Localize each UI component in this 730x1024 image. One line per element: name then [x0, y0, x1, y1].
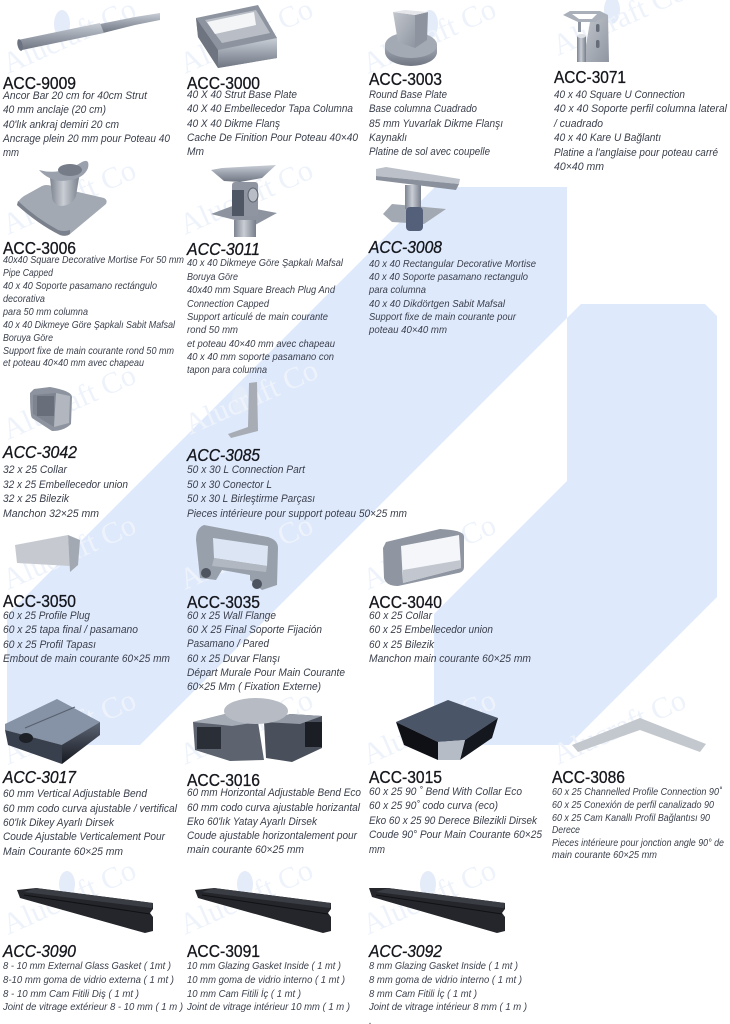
heading: ACC-3071	[554, 67, 626, 87]
description: 40 mm anclaje (20 cm)	[3, 104, 106, 116]
description: 50 x 30 Conector L	[187, 479, 272, 491]
icon: round base plate	[385, 10, 437, 66]
description: / cuadrado	[553, 118, 603, 130]
description: 60 X 25 Final Soporte Fijación	[187, 624, 322, 636]
product: ACC-3011	[186, 165, 344, 376]
description: 40 x 40 mm soporte pasamano con	[187, 351, 334, 363]
description: 40x40 Square Decorative Mortise For 50 mm	[3, 254, 184, 266]
description: 60×25 Mm ( Fixation Externe)	[187, 681, 321, 693]
product: ACC-3006	[2, 161, 184, 369]
description: 40 X 40 Dikme Flanş	[187, 118, 280, 130]
product: ACC-3071	[553, 11, 728, 173]
heading: ACC-3091	[187, 941, 260, 961]
description	[368, 258, 536, 336]
description: main courante 60×25 mm	[552, 849, 657, 861]
product: ACC-3008	[368, 167, 536, 336]
description: main courante 60×25 mm	[187, 844, 304, 856]
icon: 90 degree bend with collar	[396, 700, 498, 760]
description: 40 X 40 Strut Base Plate	[187, 89, 297, 101]
description	[3, 788, 178, 858]
description: Platine a l'anglaise pour poteau carré	[554, 147, 718, 159]
description: Départ Murale Pour Main Courante	[187, 667, 345, 679]
watermarks: Alucraft Co	[0, 358, 141, 446]
heading: ACC-3015	[369, 767, 442, 787]
heading: ACC-3017	[2, 767, 77, 787]
description: 60 x 25 Collar	[369, 610, 433, 622]
description: mm	[3, 147, 19, 159]
description: 60 mm Horizontal Adjustable Bend Eco	[187, 787, 361, 799]
description: 60 x 25 90 ˚ Bend With Collar Eco	[369, 786, 522, 798]
description: decorativa	[3, 293, 45, 305]
description: 40 x 40 Kare U Bağlantı	[554, 132, 661, 144]
description: 8 mm Glazing Gasket Inside ( 1 mt )	[369, 960, 518, 972]
description: Support fixe de main courante rond 50 mm	[3, 345, 174, 357]
description: Derece	[552, 824, 580, 836]
icon: collar 32x25	[30, 387, 72, 431]
description: Kaynaklı	[369, 132, 407, 144]
description: 32 x 25 Embellecedor union	[3, 479, 128, 491]
product: ACC-3000	[187, 5, 359, 158]
description: Support articulé de main courante	[187, 311, 328, 323]
description: 40 X 40 Embellecedor Tapa Columna	[187, 103, 353, 115]
description: Ancor Bar 20 cm for 40cm Strut	[2, 90, 148, 102]
description: Coude 90° Pour Main Courante 60×25	[369, 829, 543, 841]
icon: anchor bar	[16, 13, 160, 51]
icon: strut base plate	[196, 5, 277, 68]
heading: ACC-3003	[369, 69, 442, 89]
watermarks: Alucraft Co	[357, 683, 501, 771]
product: ACC-3035	[187, 525, 345, 693]
description: Round Base Plate	[369, 89, 447, 101]
heading: ACC-3092	[368, 941, 442, 961]
icon: profile plug	[15, 535, 80, 572]
watermarks: Alucraft Co	[0, 153, 141, 241]
watermarks: Alucraft Co	[547, 683, 691, 771]
icon: square U connection	[563, 11, 609, 62]
description: Joint de vitrage intérieur 8 mm ( 1 m )	[368, 1001, 527, 1013]
heading: ACC-3090	[2, 941, 76, 961]
description: Pieces intérieure pour support poteau 50×25 mm	[187, 508, 407, 520]
icon: collar 60x25	[383, 529, 464, 586]
product: ACC-3050	[3, 535, 170, 665]
watermarks: Alucraft Co	[174, 153, 318, 241]
description: 60 x 25 tapa final / pasamano	[3, 624, 138, 636]
description: 40 x 40 Soporte pasamano rectángulo	[3, 280, 157, 292]
description	[187, 89, 359, 158]
description: 60 x 25 Bilezik	[369, 639, 434, 651]
description: 60 mm codo curva ajustable horizantal	[187, 802, 361, 814]
description: 10 mm Cam Fitili İç ( 1 mt )	[187, 988, 301, 1000]
description: 40 x 40 Dikmeye Göre Şapkalı Sabit Mafsal	[3, 319, 176, 331]
icon: rectangular mortise	[376, 167, 460, 231]
icon: vertical adjustable bend	[5, 699, 100, 764]
watermarks: Alucraft Co	[174, 683, 318, 771]
product: ACC-3016	[187, 698, 361, 856]
description: 40 x 40 Dikmeye Göre Şapkalı Mafsal	[187, 257, 344, 269]
description: 40 x 40 Soporte pasamano rectangulo	[369, 271, 528, 283]
product: ACC-3090	[2, 888, 183, 1013]
description: 8-10 mm goma de vidrio externa ( 1 mt )	[3, 974, 174, 986]
description: Pipe Capped	[3, 267, 54, 279]
description	[369, 786, 543, 856]
description: 10 mm goma de vidrio interno ( 1 mt )	[187, 974, 345, 986]
description: et poteau 40×40 mm avec chapeau	[3, 357, 144, 369]
description	[187, 464, 407, 520]
description: 32 x 25 Bilezik	[3, 493, 69, 505]
icon: channelled profile connection	[572, 718, 706, 752]
icon: glass gasket	[17, 888, 153, 933]
description: para columna	[368, 284, 426, 296]
product: ACC-9009	[2, 13, 171, 159]
description	[2, 90, 171, 159]
heading: ACC-3006	[3, 238, 76, 258]
description: 60 x 25 Embellecedor union	[369, 624, 493, 636]
description: para 50 mm columna	[2, 306, 88, 318]
watermarks: Alucraft Co	[174, 508, 318, 596]
description: 60 mm codo curva ajustable / vertifical	[3, 803, 178, 815]
description: Main Courante 60×25 mm	[3, 846, 123, 858]
heading: ACC-3008	[368, 237, 442, 257]
product: ACC-3042	[2, 387, 128, 520]
watermarks: Alucraft Co	[174, 853, 318, 941]
description: Ancrage plein 20 mm pour Poteau 40	[2, 133, 171, 145]
description: 60 x 25 Profil Tapası	[3, 639, 96, 651]
heading: ACC-3016	[187, 770, 260, 790]
description: 50 x 30 L Connection Part	[187, 464, 306, 476]
product: ACC-3086	[552, 718, 724, 861]
watermarks: Alucraft Co	[0, 683, 141, 771]
heading: ACC-3042	[2, 442, 77, 462]
description: Platine de sol avec coupelle	[369, 146, 490, 158]
description: poteau 40×40 mm	[368, 324, 447, 336]
watermarks: Alucraft Co	[357, 853, 501, 941]
description: tapon para columna	[187, 364, 267, 376]
description	[553, 89, 728, 173]
description: Boruya Göre	[187, 271, 238, 283]
description	[187, 787, 361, 856]
product: ACC-3003	[369, 10, 503, 158]
description: Manchon 32×25 mm	[3, 508, 99, 520]
description: Cache De Finition Pour Poteau 40×40	[187, 132, 359, 144]
description: Embout de main courante 60×25 mm	[3, 653, 170, 665]
description: Pasamano / Pared	[187, 638, 270, 650]
background shape: right blue chevron	[434, 304, 717, 745]
description: Boruya Göre	[3, 332, 53, 344]
heading: ACC-3035	[187, 592, 260, 612]
background shape: large blue chevron	[7, 187, 567, 745]
product: ACC-3092	[368, 888, 527, 1024]
description: 60'lık Dikey Ayarlı Dirsek	[3, 817, 114, 829]
watermarks: Alucraft Co	[179, 353, 323, 441]
watermarks: Alucraft Co	[357, 508, 501, 596]
description: Coude ajustable horizontalement pour	[187, 830, 358, 842]
description: et poteau 40×40 mm avec chapeau	[187, 338, 335, 350]
icon: horizontal adjustable bend	[193, 698, 322, 762]
description: Coude Ajustable Verticalement Pour	[3, 831, 166, 843]
product: ACC-3017	[2, 699, 178, 858]
description: 40'lık ankraj demiri 20 cm	[3, 119, 119, 131]
heading: ACC-3000	[187, 73, 260, 93]
description	[3, 610, 170, 665]
product: ACC-3015	[369, 700, 543, 856]
description: 50 x 30 L Birleştirme Parçası	[187, 493, 315, 505]
description: 40 x 40 Rectangular Decorative Mortise	[369, 258, 536, 270]
watermarks: Alucraft Co	[0, 853, 141, 941]
description: Joint de vitrage extérieur 8 - 10 mm ( 1 m )	[2, 1001, 183, 1013]
heading: ACC-3050	[3, 591, 76, 611]
description: rond 50 mm	[187, 324, 238, 336]
description: 8 - 10 mm Cam Fitili Diş ( 1 mt )	[3, 988, 139, 1000]
description: 60 mm Vertical Adjustable Bend	[3, 788, 148, 800]
icon: glazing gasket 10 mm	[195, 888, 331, 933]
description: Mm	[187, 146, 204, 158]
description: 60 x 25 90˚ codo curva (eco)	[369, 800, 498, 812]
description	[369, 610, 531, 665]
description: Manchon main courante 60×25 mm	[369, 653, 531, 665]
description: mm	[369, 844, 385, 856]
description: 40 x 40 Square U Connection	[554, 89, 685, 101]
description	[186, 960, 350, 1013]
description: 8 mm Cam Fitili İç ( 1 mt )	[369, 988, 477, 1000]
description	[2, 960, 183, 1013]
description: 8 - 10 mm External Glass Gasket ( 1mt )	[3, 960, 171, 972]
description: 85 mm Yuvarlak Dikme Flanşı	[369, 118, 503, 130]
description: Eko 60 x 25 90 Derece Bilezikli Dirsek	[369, 815, 537, 827]
heading: ACC-9009	[3, 73, 76, 93]
description: 10 mm Glazing Gasket Inside ( 1 mt )	[187, 960, 341, 972]
description	[3, 464, 128, 520]
description	[369, 89, 503, 158]
product: ACC-3091	[186, 888, 350, 1013]
icon: L connection	[228, 382, 258, 438]
icon: breach plug capped	[211, 165, 277, 237]
description	[368, 960, 527, 1024]
heading: ACC-3086	[552, 767, 625, 787]
watermarks: Alucraft Co	[0, 508, 141, 596]
icon: decorative mortise capped	[17, 161, 107, 236]
description: 40×40 mm	[554, 161, 604, 173]
description: 40x40 mm Square Breach Plug And	[187, 284, 336, 296]
description: 32 x 25 Collar	[3, 464, 68, 476]
description: 8 mm goma de vidrio interno ( 1 mt )	[369, 974, 522, 986]
description: 60 x 25 Duvar Flanşı	[187, 653, 280, 665]
description	[187, 257, 344, 376]
description: Joint de vitrage intérieur 10 mm ( 1 m )	[186, 1001, 350, 1013]
description: 60 x 25 Wall Flange	[187, 610, 276, 622]
description: Base columna Cuadrado	[369, 103, 477, 115]
product: ACC-3040	[369, 529, 531, 665]
heading: ACC-3085	[186, 445, 260, 465]
description	[552, 786, 724, 861]
heading: ACC-3011	[186, 239, 260, 259]
description: 40 x 40 Dikdörtgen Sabit Mafsal	[369, 298, 506, 310]
description: Eko 60'lık Yatay Ayarlı Dirsek	[187, 816, 317, 828]
icon: wall flange	[196, 525, 278, 590]
heading: ACC-3040	[369, 592, 442, 612]
icon: glazing gasket 8 mm	[369, 888, 505, 933]
product: ACC-3085	[186, 382, 407, 520]
description: 60 x 25 Profile Plug	[3, 610, 91, 622]
description: Support fixe de main courante pour	[369, 311, 516, 323]
description	[187, 610, 345, 693]
description: Connection Capped	[187, 298, 270, 310]
description	[2, 254, 184, 369]
